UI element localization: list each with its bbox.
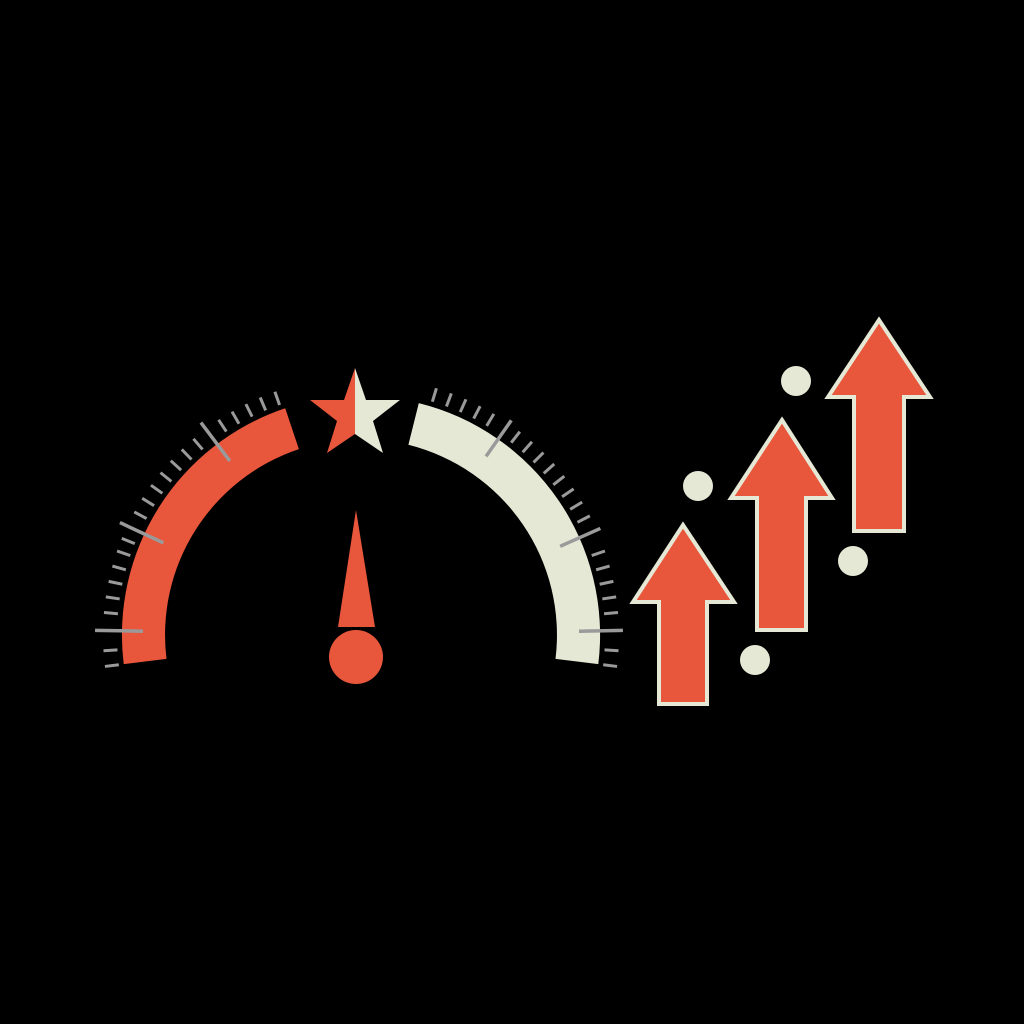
rising arrows <box>633 320 930 704</box>
right cream arc <box>408 403 600 664</box>
dots <box>683 366 868 675</box>
arrow 2 <box>731 420 832 630</box>
gauge <box>95 368 623 684</box>
arrow 3 <box>828 320 930 531</box>
minor ticks right <box>432 388 619 666</box>
arrow 1 <box>633 525 734 704</box>
icon: star <box>310 368 400 453</box>
needle <box>329 510 383 684</box>
major ticks <box>95 420 623 631</box>
minor ticks left <box>103 392 280 666</box>
left red arc <box>122 408 299 664</box>
